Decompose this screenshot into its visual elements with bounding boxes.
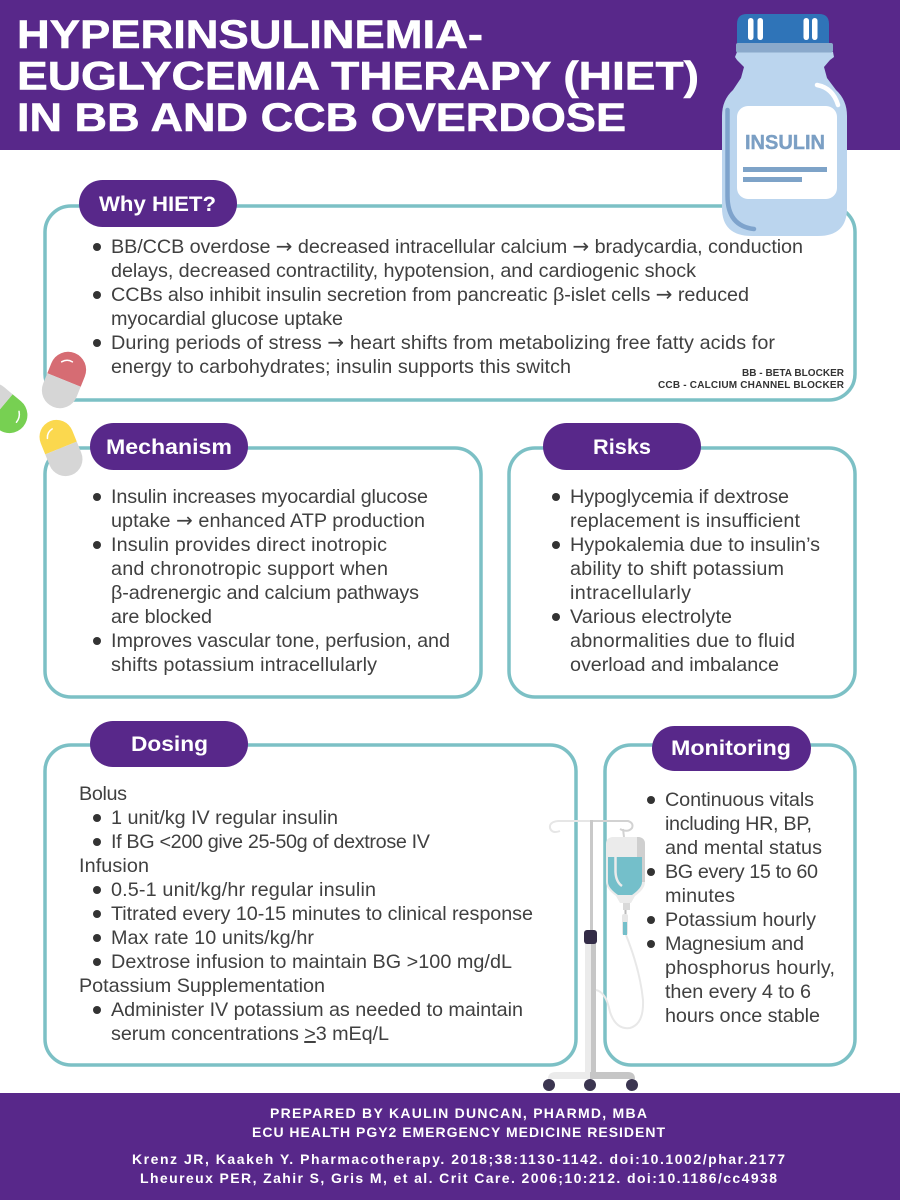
footer references: [132, 1151, 785, 1186]
abbreviation key: CCB - CALCIUM CHANNEL BLOCKER: [658, 380, 845, 391]
heading: why HIET: [79, 180, 237, 227]
heading: mechanism: [90, 423, 248, 470]
bullet list: mechanism: Insulin provides direct inotropic: [111, 534, 387, 556]
bullet list: monitoring: [647, 789, 835, 1027]
icon: yellow capsule: [34, 415, 88, 481]
bullet list: mechanism: shifts potassium intracellularly: [111, 654, 377, 676]
panel: risks: [509, 423, 855, 697]
icon: red capsule: [36, 346, 92, 414]
heading: why HIET: Why HIET?: [99, 192, 216, 216]
bullet list: why HIET: myocardial glucose uptake: [111, 308, 343, 330]
icon: green capsule: [0, 376, 35, 440]
footer references: Lheureux PER, Zahir S, Gris M, et al. Crit Care. 2006;10:212. doi:10.1186/cc4938: [140, 1170, 777, 1186]
bullet list: mechanism: uptake → enhanced ATP production: [111, 508, 425, 532]
panel: dosing: [45, 721, 576, 1065]
heading: monitoring: [652, 726, 811, 771]
icon: IV stand and bag: [543, 820, 645, 1091]
bullet list: why HIET: [93, 234, 803, 378]
panel: why HIET: [45, 180, 855, 400]
bullet list: risks: overload and imbalance: [570, 654, 779, 676]
bullet list: monitoring: phosphorus hourly,: [665, 957, 835, 979]
dosing instructions: 0.5-1 unit/kg/hr regular insulin: [111, 879, 376, 901]
dosing instructions: Administer IV potassium as needed to maintain: [111, 999, 523, 1021]
bullet list: monitoring: including HR, BP,: [665, 813, 812, 835]
heading: risks: [543, 423, 701, 470]
dosing instructions: Bolus: [79, 783, 127, 805]
heading: monitoring: Monitoring: [671, 736, 791, 760]
bullet list: why HIET: delays, decreased contractility, hypotension, and cardiogenic shock: [111, 260, 696, 282]
title: HYPERINSULINEMIA-: [17, 13, 483, 57]
abbreviation key: [658, 368, 845, 391]
dosing instructions: Dextrose infusion to maintain BG >100 mg/dL: [111, 951, 512, 973]
bullet list: why HIET: CCBs also inhibit insulin secretion from pancreatic β-islet cells → reduced: [111, 282, 749, 306]
title: [17, 13, 699, 140]
bullet list: monitoring: Magnesium and: [665, 933, 804, 955]
bullet list: risks: Hypoglycemia if dextrose: [570, 486, 789, 508]
bullet list: monitoring: and mental status: [665, 837, 822, 859]
footer references: Krenz JR, Kaakeh Y. Pharmacotherapy. 2018;38:1130-1142. doi:10.1002/phar.2177: [132, 1151, 785, 1167]
icon: insulin bottle: INSULIN: [745, 132, 825, 154]
footer band: [0, 1093, 900, 1200]
dosing instructions: [79, 783, 533, 1045]
bullet list: mechanism: and chronotropic support when: [111, 558, 388, 580]
dosing instructions: If BG <200 give 25-50g of dextrose IV: [111, 831, 431, 853]
header band: [0, 0, 900, 150]
bullet list: mechanism: Improves vascular tone, perfusion, and: [111, 630, 450, 652]
bullet list: monitoring: Potassium hourly: [665, 909, 816, 931]
footer credits: ECU HEALTH PGY2 EMERGENCY MEDICINE RESIDENT: [252, 1124, 665, 1140]
bullet list: mechanism: are blocked: [111, 606, 212, 628]
dosing instructions: serum concentrations >3 mEq/L: [111, 1023, 389, 1045]
icon: insulin bottle: [722, 14, 847, 236]
bullet list: monitoring: minutes: [665, 885, 735, 907]
bullet list: risks: intracellularly: [570, 582, 691, 604]
bullet list: monitoring: then every 4 to 6: [665, 981, 811, 1003]
panel: mechanism: [45, 423, 481, 697]
bullet list: risks: replacement is insufficient: [570, 510, 800, 532]
abbreviation key: BB - BETA BLOCKER: [742, 368, 845, 379]
bullet list: risks: Hypokalemia due to insulin’s: [570, 534, 820, 556]
heading: dosing: [90, 721, 248, 767]
dosing instructions: Titrated every 10-15 minutes to clinical response: [111, 903, 533, 925]
bullet list: why HIET: During periods of stress → heart shifts from metabolizing free fatty acids for: [111, 330, 775, 354]
footer credits: PREPARED BY KAULIN DUNCAN, PHARMD, MBA: [270, 1105, 647, 1121]
bullet list: mechanism: [93, 486, 450, 676]
heading: dosing: Dosing: [131, 732, 208, 756]
bullet list: monitoring: Continuous vitals: [665, 789, 814, 811]
dosing instructions: Max rate 10 units/kg/hr: [111, 927, 314, 949]
bullet list: monitoring: BG every 15 to 60: [665, 861, 818, 883]
bullet list: why HIET: BB/CCB overdose → decreased intracellular calcium → bradycardia, conduction: [111, 234, 803, 258]
bullet list: mechanism: Insulin increases myocardial glucose: [111, 486, 428, 508]
bullet list: risks: [552, 486, 820, 676]
bullet list: risks: Various electrolyte: [570, 606, 732, 628]
bullet list: monitoring: hours once stable: [665, 1005, 820, 1027]
title: EUGLYCEMIA THERAPY (HIET): [17, 54, 699, 98]
bullet list: why HIET: energy to carbohydrates; insulin supports this switch: [111, 356, 571, 378]
footer credits: [252, 1105, 665, 1140]
dosing instructions: Infusion: [79, 855, 149, 877]
bullet list: mechanism: β-adrenergic and calcium pathways: [111, 582, 419, 604]
bullet list: risks: abnormalities due to fluid: [570, 630, 795, 652]
title: IN BB AND CCB OVERDOSE: [17, 96, 626, 140]
bullet list: risks: ability to shift potassium: [570, 558, 784, 580]
dosing instructions: 1 unit/kg IV regular insulin: [111, 807, 338, 829]
heading: risks: Risks: [593, 435, 651, 459]
heading: mechanism: Mechanism: [106, 435, 232, 459]
panel: monitoring: [605, 726, 855, 1065]
dosing instructions: Potassium Supplementation: [79, 975, 325, 997]
